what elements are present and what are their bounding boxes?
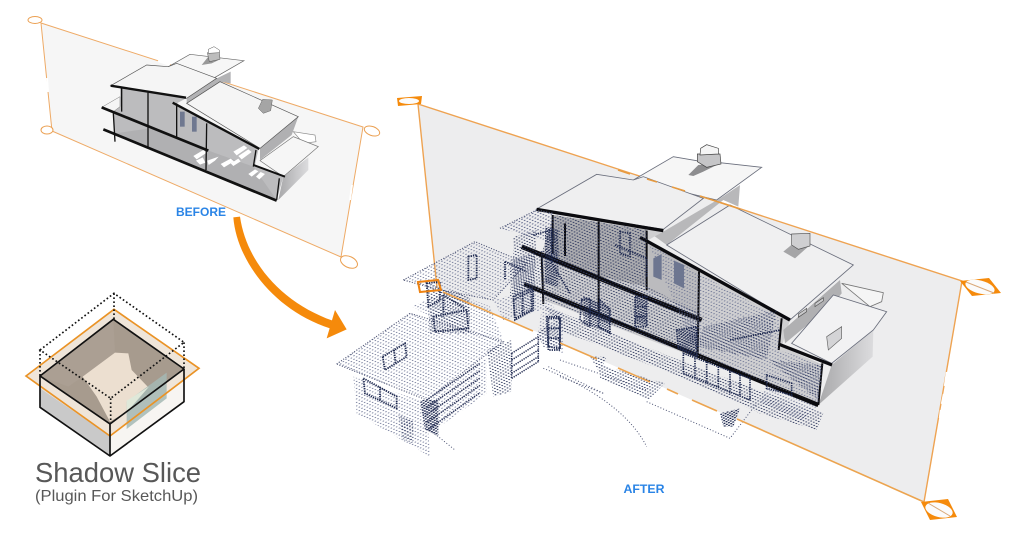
- logo title: Shadow Slice: [35, 457, 201, 488]
- icon: after plane handles: [397, 96, 1001, 520]
- chimney front: [258, 99, 272, 113]
- after house model: [522, 145, 887, 405]
- panel: after section plane: [418, 104, 962, 502]
- chimney back: [688, 145, 721, 176]
- label: after: AFTER: [624, 482, 665, 496]
- garage walls: [353, 340, 512, 457]
- chimney front: [783, 233, 810, 258]
- dense framing clusters: [513, 227, 697, 357]
- garage roof: [337, 313, 503, 400]
- arrow: before to after: [233, 217, 347, 338]
- icon: before plane handles: [28, 16, 381, 271]
- chimney back: [202, 47, 220, 65]
- section interior dots, zoom offset: [500, 210, 823, 403]
- upper roofs: [403, 210, 563, 353]
- before house model: [102, 47, 318, 201]
- vent: [827, 327, 842, 350]
- section cut lines: [522, 209, 832, 405]
- logo icon: shadow slice box: [26, 293, 199, 456]
- logo subtitle: (Plugin For SketchUp): [35, 488, 198, 505]
- dotted ghost geometry: [337, 210, 823, 457]
- interior framing: [513, 230, 792, 400]
- panel: before section plane: [28, 16, 381, 271]
- ground hatch and terrace: [543, 305, 823, 430]
- orange plane edge over model: [443, 170, 924, 502]
- label: before: BEFORE: [176, 205, 226, 219]
- garage doors: [427, 337, 538, 429]
- ghost windows: [363, 255, 560, 408]
- site outlines: [430, 360, 757, 450]
